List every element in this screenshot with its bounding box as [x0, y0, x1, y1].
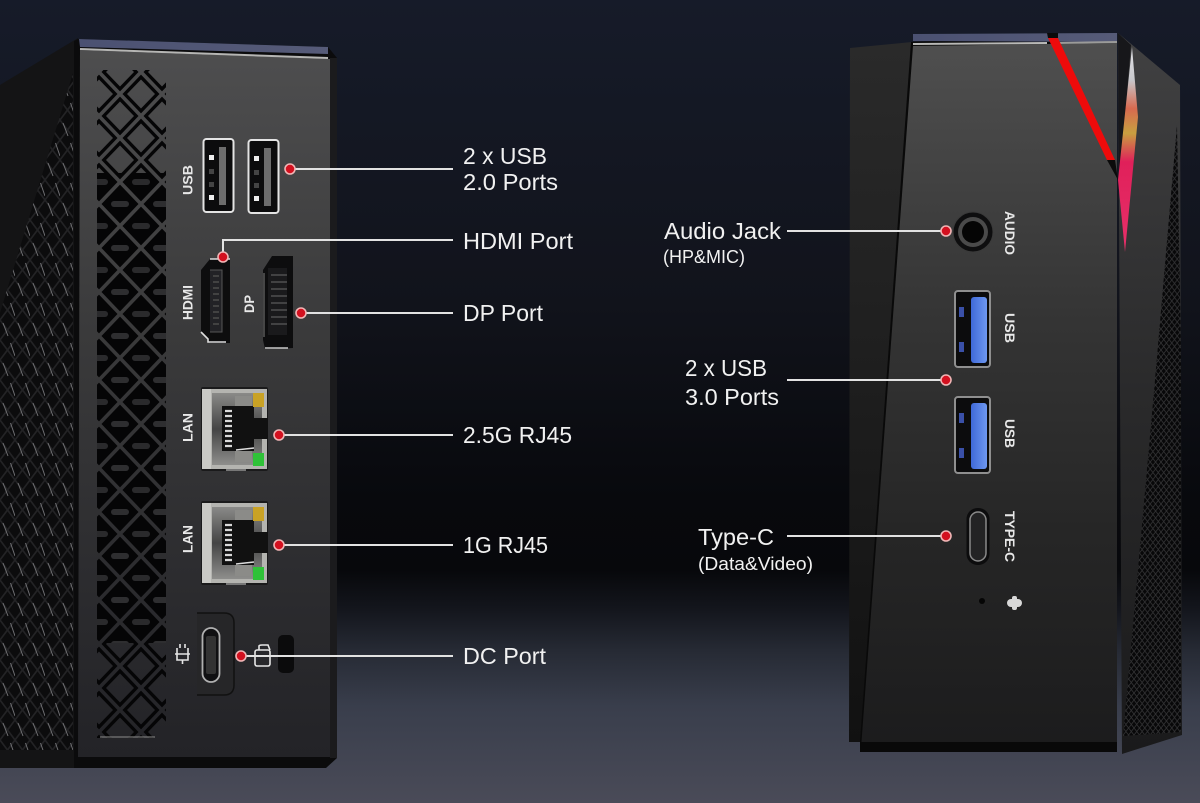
mic hole	[979, 598, 985, 604]
LAN port 2.5G	[201, 387, 268, 471]
USB 2.0 ports	[204, 139, 278, 213]
left device side face	[0, 38, 78, 768]
DP port	[263, 256, 293, 349]
panel: right device front view	[849, 33, 1182, 754]
callout: 2 x USB 2.0: 2 x USB	[463, 143, 547, 169]
callout: Type-C: Type-C	[698, 524, 774, 550]
audio label: AUDIO	[1002, 211, 1018, 255]
callout: audio jack: Audio Jack	[664, 218, 782, 244]
Type-C port	[966, 508, 990, 565]
DP label: DP	[241, 295, 257, 313]
callout: audio jack: (HP&MIC)	[663, 246, 745, 267]
callout: Type-C: (Data&Video)	[698, 553, 813, 574]
callout: HDMI	[218, 228, 574, 262]
callout: 1G RJ45: 1G RJ45	[463, 532, 548, 558]
callout: 1G RJ45	[274, 532, 548, 558]
sticker	[1118, 47, 1138, 252]
Type-C label: TYPE-C	[1002, 511, 1018, 562]
right device right face	[1118, 33, 1182, 754]
HDMI port	[201, 259, 230, 343]
right device front face	[860, 33, 1117, 752]
callout: 2 x USB 3.0: 2 x USB	[685, 355, 767, 381]
red light stripe	[1047, 33, 1118, 180]
LAN label bottom: LAN	[180, 525, 196, 553]
callout: DC port: DC Port	[463, 643, 547, 669]
callout: Type-C	[698, 524, 951, 574]
icon: plug	[175, 644, 190, 664]
vent grille	[97, 70, 166, 738]
callout: DP	[296, 300, 544, 326]
callout: 2 x USB 2.0	[285, 143, 558, 195]
callout: HDMI: HDMI Port	[463, 228, 574, 254]
audio jack	[953, 212, 993, 252]
USB label right top: USB	[1002, 313, 1018, 343]
right device left face	[849, 42, 912, 742]
lock slot	[278, 635, 294, 673]
USB label: USB	[180, 165, 196, 195]
USB label right bottom: USB	[1002, 419, 1018, 448]
callout: 2.5G RJ45: 2.5G RJ45	[463, 422, 572, 448]
callout: 2 x USB 2.0: 2.0 Ports	[463, 169, 558, 195]
callout: audio jack	[663, 218, 951, 267]
callout: 2 x USB 3.0: 3.0 Ports	[685, 384, 779, 410]
LAN port 1G	[201, 501, 268, 585]
panel: left device rear view	[0, 38, 337, 768]
HDMI label: HDMI	[180, 285, 196, 320]
callout: 2 x USB 3.0	[685, 355, 951, 410]
callout: DP: DP Port	[463, 300, 544, 326]
LAN label top: LAN	[180, 413, 196, 442]
icon: microphone	[1007, 596, 1022, 610]
left device front face	[74, 39, 337, 768]
USB 3.0 bottom	[955, 397, 990, 473]
icon: lock	[255, 645, 270, 666]
callout: 2.5G RJ45	[274, 422, 572, 448]
callout: DC port	[236, 643, 547, 669]
USB 3.0 top	[955, 291, 990, 367]
DC port recess	[197, 613, 234, 695]
